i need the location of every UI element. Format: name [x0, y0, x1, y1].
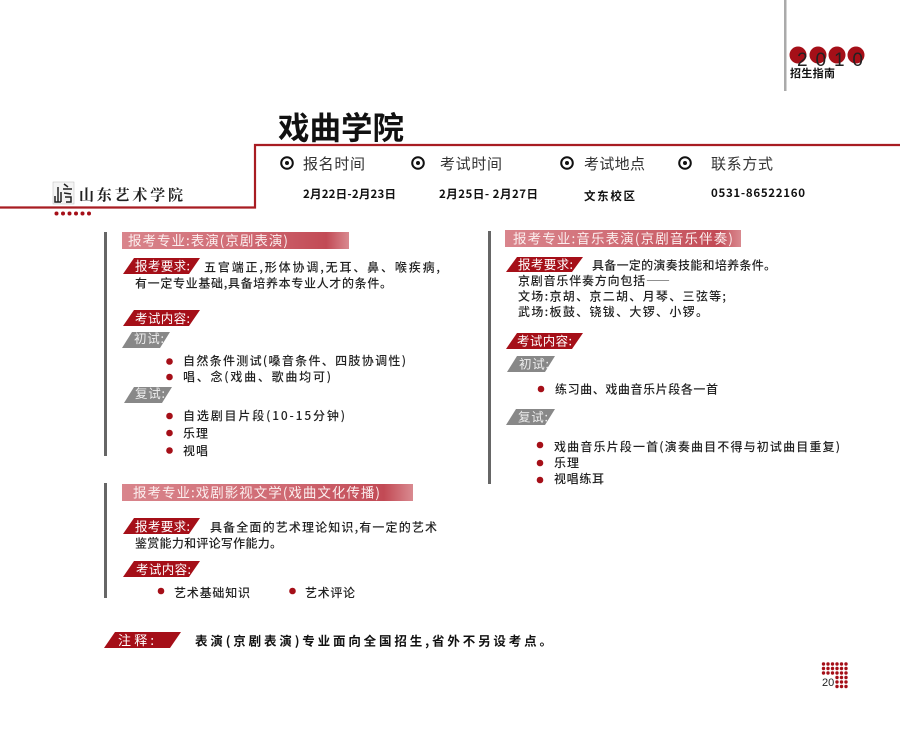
info: registration time: 报名时间 — [303, 153, 365, 174]
retest list: 乐理 — [183, 424, 208, 442]
retest list: 乐理 — [554, 454, 579, 471]
requirements — [123, 516, 437, 552]
preliminary list: 唱、念(戏曲、歌曲均可) — [183, 368, 331, 385]
preliminary tag: 初试: — [519, 354, 549, 372]
preliminary tag — [122, 328, 170, 348]
info: exam time: 2月25日- 2月27日 — [439, 186, 538, 202]
panel: acting (Peking opera) — [104, 230, 440, 459]
retest tag: 复试: — [135, 383, 165, 402]
major heading: 报考专业:音乐表演(京剧音乐伴奏) — [513, 228, 733, 248]
preliminary list — [166, 352, 406, 385]
info: contact: 0531-86522160 — [711, 185, 805, 201]
note: 注释: — [118, 630, 154, 649]
retest list: 视唱练耳 — [554, 470, 604, 487]
retest list — [166, 407, 345, 459]
requirements: 京剧音乐伴奏方向包括—— — [518, 272, 670, 289]
requirements: 五官端正,形体协调,无耳、鼻、喉疾病, — [204, 258, 440, 276]
requirements: 报考要求: — [135, 516, 190, 535]
badge: 2010 admissions guide — [784, 0, 864, 91]
exam content tag: 考试内容: — [136, 559, 191, 578]
requirements: 有一定专业基础,具备培养本专业人才的条件。 — [135, 274, 392, 292]
requirements — [123, 256, 440, 292]
requirements: 文场:京胡、京二胡、月琴、三弦等; — [518, 288, 726, 304]
retest list: 戏曲音乐片段一首(演奏曲目不得与初试曲目重复) — [554, 438, 840, 455]
retest tag: 复试: — [518, 406, 548, 426]
info: exam location: 考试地点 — [584, 153, 645, 174]
info: registration time: 2月22日-2月23日 — [303, 186, 396, 202]
major heading: 报考专业:表演(京剧表演) — [128, 230, 288, 250]
panel: music performance (Peking opera accompaniment) — [488, 228, 840, 487]
preliminary list: 自然条件测试(嗓音条件、四肢协调性) — [183, 352, 406, 369]
exam content list: 艺术基础知识 — [174, 584, 250, 601]
preliminary list: 练习曲、戏曲音乐片段各一首 — [555, 380, 718, 398]
info: exam location — [561, 153, 645, 204]
title: 戏曲学院 — [278, 103, 404, 149]
requirements: 报考要求: — [135, 256, 190, 274]
major heading: 报考专业:戏剧影视文学(戏曲文化传播) — [133, 482, 380, 502]
retest tag — [506, 406, 555, 426]
info: exam time — [412, 153, 538, 202]
requirements: 报考要求: — [518, 254, 573, 273]
preliminary tag — [507, 354, 555, 372]
info: registration time — [281, 153, 396, 202]
exam content list: 艺术评论 — [305, 584, 355, 601]
page number with dot grid — [822, 662, 848, 689]
exam content tag: 考试内容: — [135, 308, 190, 327]
info: contact: 联系方式 — [711, 153, 773, 174]
requirements — [506, 254, 776, 320]
exam content list — [158, 584, 355, 601]
requirements: 鉴赏能力和评论写作能力。 — [135, 534, 282, 552]
header rule — [0, 145, 900, 208]
requirements: 具备一定的演奏技能和培养条件。 — [592, 256, 776, 274]
logo dots — [54, 212, 91, 216]
retest list: 视唱 — [183, 442, 208, 459]
page number with dot grid: 20 — [822, 677, 834, 689]
requirements: 具备全面的艺术理论知识,有一定的艺术 — [210, 518, 437, 536]
info: exam location: 文东校区 — [584, 188, 636, 204]
preliminary tag: 初试: — [134, 328, 164, 347]
panel: drama, film and TV literature — [104, 482, 437, 601]
requirements: 武场:板鼓、铙钹、大锣、小锣。 — [518, 303, 708, 320]
info: contact — [679, 153, 805, 201]
retest tag — [124, 383, 172, 403]
exam content tag: 考试内容: — [517, 330, 572, 350]
logo: Shandong University of Arts: 山东艺术学院 — [79, 184, 183, 205]
badge: 2010 admissions guide: 2010 — [797, 50, 863, 71]
info: exam time: 考试时间 — [440, 153, 502, 174]
note: 表演(京剧表演)专业面向全国招生,省外不另设考点。 — [195, 630, 552, 650]
retest list — [537, 438, 840, 487]
badge: 2010 admissions guide: 招生指南 — [790, 65, 835, 81]
retest list: 自选剧目片段(10-15分钟) — [183, 407, 345, 424]
